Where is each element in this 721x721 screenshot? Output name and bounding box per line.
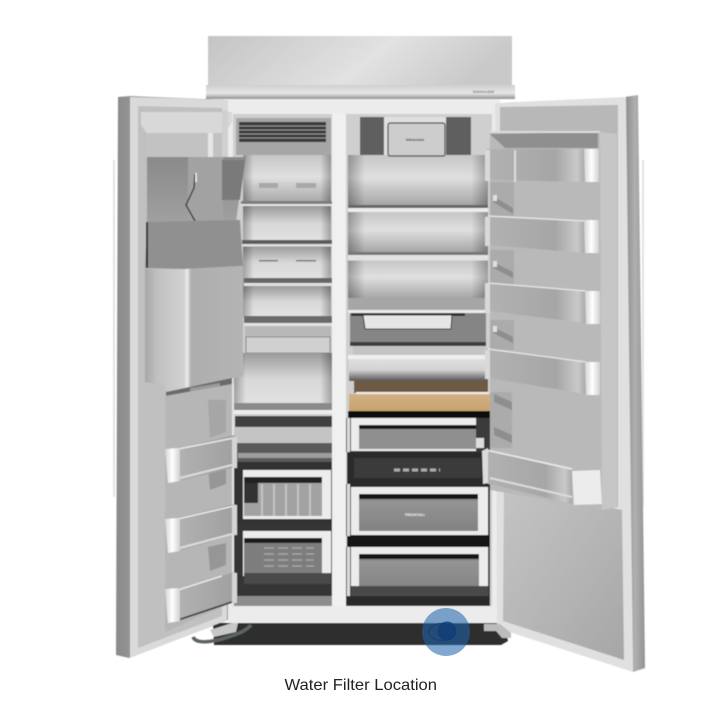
left drawer top [234,462,332,526]
door liner [138,106,222,648]
door frame [495,97,633,672]
middle drawer [346,484,490,536]
wire shelves [241,201,332,326]
door lower panel [503,487,624,660]
refrigerator [113,36,645,672]
caption: Water Filter Location [284,677,437,694]
right door bin 1 [485,149,599,182]
filter cover [388,123,445,156]
right door bin 2 [485,216,599,253]
bottom drawer [346,547,490,606]
open wall [234,353,332,405]
water dispenser housing [360,117,471,156]
left door bin 2 [165,504,237,553]
lower door liner [165,384,232,632]
door liner upper [500,105,618,134]
back wall [346,114,492,606]
small drawer [245,326,331,353]
door outer edge [116,96,228,658]
lower wire shelves [234,403,332,462]
hinge and cord [193,623,251,642]
shelf 3 with deli drawer [348,298,488,359]
wood drawer [349,359,490,411]
filter cap [438,622,456,640]
control panel [347,452,488,484]
base kick plate [213,623,508,645]
rack side posts [490,182,514,448]
right door bin 4 [485,349,600,395]
water filter location marker [422,608,470,656]
door outer edge [625,95,645,672]
hinge [484,624,511,638]
left compartment interior [233,114,332,606]
left drawer bottom [234,525,332,606]
water dispenser housing: KitchenAid [406,138,424,142]
top grille housing [206,36,515,99]
middle drawer: FRESHCHILL [405,513,425,517]
dispenser underside [166,378,232,400]
ice bin glass [147,157,246,222]
right door bin 3 [485,283,600,324]
left door bin 1 [165,435,237,483]
ice bin base [145,220,243,269]
door frame [130,97,228,658]
side trim lines [113,160,644,507]
dispenser panel [145,266,243,392]
shelf 1 [348,205,488,212]
back wall [233,114,332,605]
upper freshchill drawer [346,418,490,452]
right compartment interior [346,114,492,606]
vent [236,118,331,155]
left door [116,96,251,658]
right door bin 5 [482,448,602,505]
right door [482,95,645,672]
shelf 2 [348,252,488,260]
bin rack panel [490,132,618,510]
center divider [332,114,346,606]
upper liner recess [141,112,232,135]
top logo: KitchenAid [473,89,495,94]
left door bin 3 [165,572,237,623]
cabinet frame [228,99,500,623]
